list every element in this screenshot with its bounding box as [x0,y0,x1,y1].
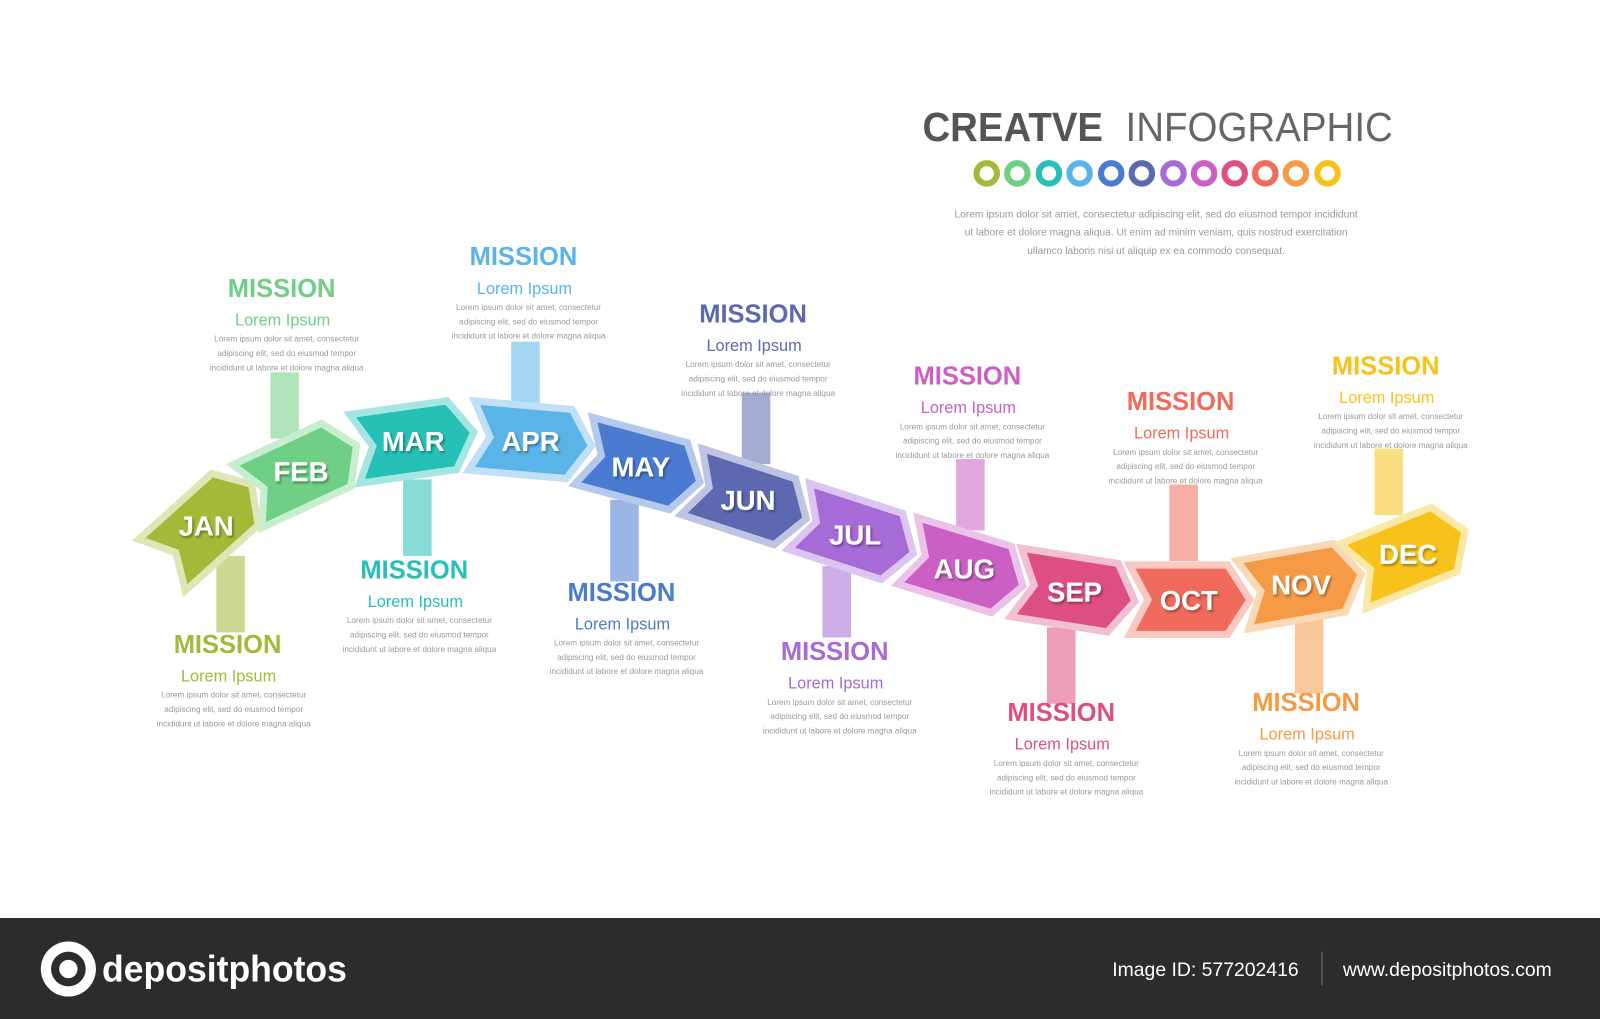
mission: MAY: incididunt ut labore et dolore magna aliqua [550,667,704,676]
mission: SEP: MISSION [1007,699,1115,727]
footer url: www.depositphotos.com [1342,959,1552,981]
mission: MAR: adipiscing elit, sed do eiusmod tempor [350,631,489,640]
title: INFOGRAPHIC [1126,104,1393,150]
arrow: AUG: AUG [934,553,995,584]
stems [216,342,1403,704]
arrow: DEC: DEC [1379,539,1437,570]
mission: NOV: adipiscing elit, sed do eiusmod tempor [1242,763,1381,772]
mission: MAY: adipiscing elit, sed do eiusmod tempor [557,653,696,662]
mission: DEC: incididunt ut labore et dolore magna aliqua [1314,441,1468,450]
mission: MAY: Lorem Ipsum [575,615,670,633]
arrow: APR: APR [502,426,560,457]
intro paragraph: Lorem ipsum dolor sit amet, consectetur adipiscing elit, sed do eiusmod tempor incididunt [954,209,1358,220]
intro paragraph [954,209,1358,257]
mission: FEB: MISSION [228,275,335,303]
arrow: FEB [233,414,371,528]
arrow: SEP [1011,548,1140,635]
title [922,104,1393,150]
mission: AUG: Lorem Ipsum [921,399,1016,417]
title: CREATVE [922,104,1103,150]
mission: FEB: adipiscing elit, sed do eiusmod tempor [217,349,356,358]
mission: NOV: incididunt ut labore et dolore magna aliqua [1234,777,1389,786]
color dots row [977,163,1338,184]
mission: MAR [343,556,497,654]
arrow: DEC [1340,499,1478,608]
intro paragraph: ut labore et dolore magna aliqua. Ut enim ad minim veniam, quis nostrud exercitation [965,228,1348,239]
arrow: NOV: NOV [1271,570,1331,601]
footer logo: depositphotos [102,948,347,989]
arrow: NOV [1237,540,1367,629]
mission: JUL: incididunt ut labore et dolore magna aliqua [763,726,917,735]
mission: DEC: Lorem Ipsum [1339,389,1434,407]
mission: JAN: MISSION [174,631,281,659]
footer logo [41,941,347,997]
mission: SEP [989,699,1144,797]
mission: MAY [550,579,704,676]
arrow: JUL: JUL [829,520,881,551]
timeline arrows [139,398,1478,635]
mission: JUL: Lorem Ipsum [788,675,883,693]
mission: SEP: Lorem Ipsum [1015,736,1110,754]
mission: MAR: Lorem ipsum dolor sit amet, consectetur [347,616,492,625]
footer image id: Image ID: 577202416 [1112,959,1299,981]
mission: OCT: incididunt ut labore et dolore magna aliqua [1109,476,1263,485]
mission: JUN: adipiscing elit, sed do eiusmod tempor [689,374,828,383]
intro paragraph: ullamco laboris nisi ut aliquip ex ea commodo consequat. [1027,246,1285,257]
mission: DEC: adipiscing elit, sed do eiusmod tempor [1321,427,1460,436]
mission: FEB: incididunt ut labore et dolore magna aliqua [210,363,364,372]
mission: JUN: Lorem Ipsum [706,337,802,355]
mission: JUN: Lorem ipsum dolor sit amet, consectetur [686,360,831,369]
mission: SEP: Lorem ipsum dolor sit amet, consectetur [994,759,1139,768]
arrow: JUN [681,449,817,552]
mission: APR: adipiscing elit, sed do eiusmod tempor [459,317,598,326]
mission: NOV: MISSION [1252,689,1360,717]
arrow: MAY [575,417,709,515]
mission: JUL [763,638,917,735]
mission: AUG: adipiscing elit, sed do eiusmod tempor [903,437,1042,446]
mission: JAN: Lorem ipsum dolor sit amet, consectetur [161,691,307,700]
mission: AUG: MISSION [913,363,1021,391]
mission: APR: Lorem Ipsum [477,280,572,298]
arrow: APR [469,401,595,481]
mission: JAN: incididunt ut labore et dolore magna aliqua [157,719,311,728]
arrow: OCT: OCT [1160,585,1218,616]
mission: MAR: Lorem Ipsum [368,593,463,611]
mission: APR: incididunt ut labore et dolore magna aliqua [452,332,606,341]
mission: FEB: Lorem ipsum dolor sit amet, consectetur [214,335,360,344]
mission: NOV [1234,689,1389,786]
arrow: JUN: JUN [720,485,776,516]
arrow: JUL [788,483,924,586]
mission: OCT: Lorem ipsum dolor sit amet, consectetur [1113,448,1259,457]
mission: FEB [210,275,364,372]
arrow: MAY: MAY [611,451,670,482]
mission: FEB: Lorem Ipsum [235,311,330,329]
mission: SEP: adipiscing elit, sed do eiusmod tempor [997,773,1136,782]
arrow: MAR: MAR [382,426,445,457]
mission: SEP: incididunt ut labore et dolore magna aliqua [989,788,1144,797]
arrow: FEB: FEB [273,456,329,487]
mission: JUN: MISSION [699,300,807,328]
mission: AUG: incididunt ut labore et dolore magna aliqua [896,451,1050,460]
arrow: JAN [139,459,275,591]
mission: DEC [1314,352,1468,450]
mission: JUL: MISSION [781,638,889,666]
mission: DEC: Lorem ipsum dolor sit amet, consectetur [1318,412,1464,421]
mission: JUL: adipiscing elit, sed do eiusmod tempor [770,712,909,721]
mission: AUG [896,363,1050,460]
mission: APR: MISSION [470,243,577,271]
mission: APR [452,243,606,341]
mission: MAR: incididunt ut labore et dolore magna aliqua [343,645,497,654]
arrow: AUG [898,518,1033,619]
mission: JUL: Lorem ipsum dolor sit amet, consectetur [767,698,913,707]
mission: JAN: adipiscing elit, sed do eiusmod tempor [164,705,303,714]
mission: AUG: Lorem ipsum dolor sit amet, consectetur [900,422,1045,431]
arrow: JAN: JAN [179,511,234,542]
mission: MAR: MISSION [360,556,468,584]
mission: JUN: incididunt ut labore et dolore magna aliqua [681,389,835,398]
arrow: OCT [1130,565,1250,634]
mission: NOV: Lorem ipsum dolor sit amet, consectetur [1239,749,1384,758]
mission: MAY: MISSION [568,579,675,607]
mission: OCT: MISSION [1127,388,1234,416]
mission: OCT: adipiscing elit, sed do eiusmod tempor [1116,462,1255,471]
arrow: MAR [350,398,479,483]
mission: OCT [1109,388,1263,485]
mission: NOV: Lorem Ipsum [1260,726,1355,744]
mission: DEC: MISSION [1332,352,1440,380]
mission blocks [157,243,1468,797]
mission: MAY: Lorem ipsum dolor sit amet, consectetur [554,639,699,648]
mission: JAN: Lorem Ipsum [181,667,276,685]
mission: APR: Lorem ipsum dolor sit amet, consectetur [456,303,601,312]
arrow: SEP: SEP [1047,577,1102,608]
mission: JAN [157,631,311,728]
footer bar [0,918,1600,1019]
mission: JUN [681,300,835,398]
mission: OCT: Lorem Ipsum [1134,425,1229,443]
